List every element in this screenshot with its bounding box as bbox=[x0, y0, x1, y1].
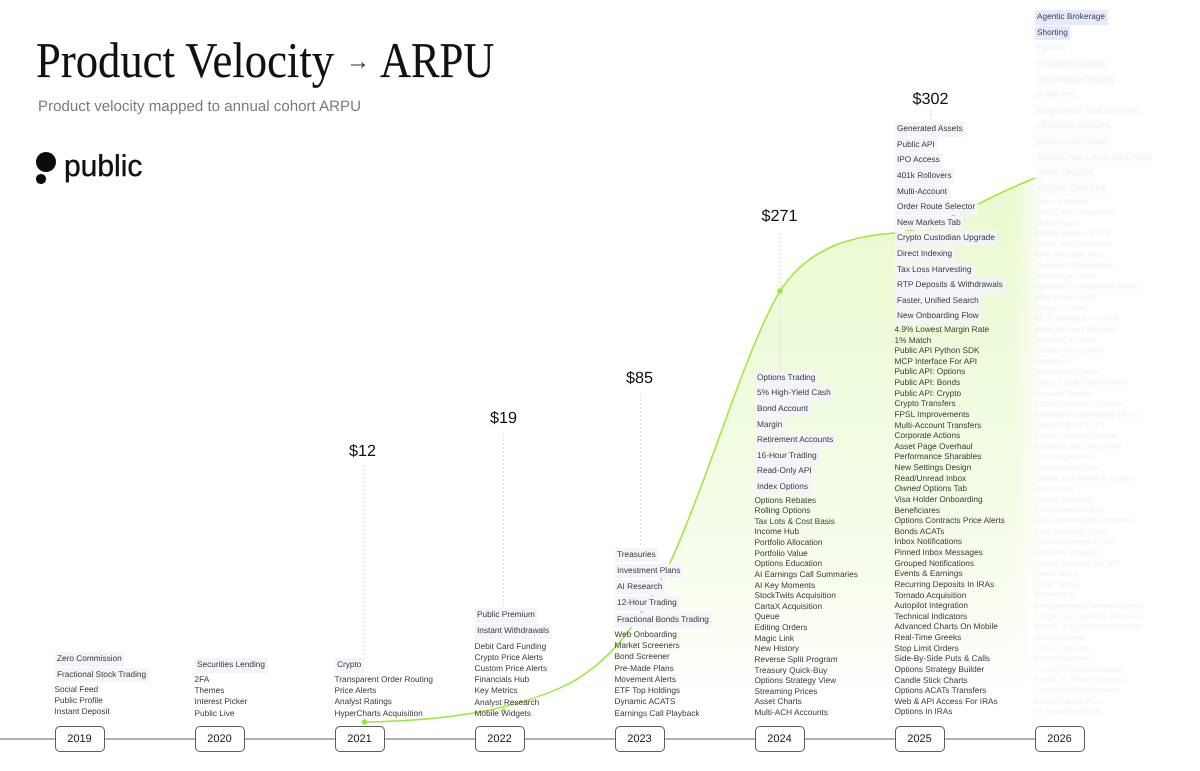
column: 2025 features: Recurring Deposits In IRAs bbox=[894, 580, 994, 589]
column: 2025 features: Options Strategy Builder bbox=[894, 665, 984, 674]
column: 2026 faded roadmap features: Shipping in Vista bbox=[1034, 335, 1096, 344]
column: 2020 features: Themes bbox=[194, 686, 224, 695]
column: 2025 features: Inbox Notifications bbox=[894, 537, 962, 546]
column: 2026 faded roadmap features: SPDR New Accounts bbox=[1034, 240, 1112, 249]
year marker: 2023 bbox=[614, 726, 664, 752]
column: 2023 features: Movement Alerts bbox=[614, 675, 676, 684]
column: 2026 highlighted features: Shorting bbox=[1037, 28, 1068, 37]
column: 2024 features: AI Earnings Call Summaries bbox=[754, 570, 858, 579]
column: 2024 features: 16-Hour Trading bbox=[757, 451, 817, 460]
column: 2024 features: Retirement Accounts bbox=[757, 435, 833, 444]
column: 2024 features: Options Strategy View bbox=[754, 676, 836, 685]
area under ARPU curve bbox=[618, 177, 1038, 648]
column: 2024 features: Portfolio Value bbox=[754, 549, 808, 558]
column: 2025 features: FPSL Improvements bbox=[894, 410, 970, 419]
column: 2025 features: Public API: Options bbox=[894, 367, 965, 376]
year marker: 2022 bbox=[474, 726, 524, 752]
column: 2022 features: Mobile Widgets bbox=[474, 709, 531, 718]
column: 2024 features: 5% High-Yield Cash bbox=[757, 388, 831, 397]
column: 2020 features: Interest Picker bbox=[194, 697, 247, 706]
column: 2024 features: Rolling Options bbox=[754, 506, 811, 515]
column: 2025 features: Read/Unread Inbox bbox=[894, 474, 966, 483]
column: 2025 features: Faster, Unified Search bbox=[897, 296, 979, 305]
column: 2026 faded roadmap features: Income Cash Year Start bbox=[1034, 442, 1122, 451]
column: 2026 faded roadmap features: New Rewards Hub bbox=[1034, 250, 1103, 259]
column: 2025 features: Options In IRAs bbox=[894, 707, 952, 716]
column: 2026 faded roadmap features: Reallocation Hub bbox=[1034, 463, 1097, 472]
column: 2026 faded roadmap features: Free Earnings Calls bbox=[1034, 527, 1107, 536]
column: 2024 features: Read-Only API bbox=[757, 466, 812, 475]
year marker: 2025: 2025 bbox=[907, 733, 932, 745]
column: 2023 features: Treasuries bbox=[617, 550, 656, 558]
column: 2024 features: Streaming Prices bbox=[754, 687, 817, 696]
column: 2023 features bbox=[614, 548, 711, 718]
year marker: 2021: 2021 bbox=[347, 733, 372, 745]
year marker: 2019: 2019 bbox=[67, 733, 92, 745]
subtitle: Product velocity mapped to annual cohort ARPU bbox=[38, 98, 361, 115]
column: 2025 features: 1% Match bbox=[894, 336, 931, 345]
column: 2019 features: Fractional Stock Trading bbox=[57, 670, 146, 679]
column: 2023 features: Pre-Made Plans bbox=[614, 664, 674, 672]
column: 2025 features: Visa Holder Onboarding bbox=[894, 495, 983, 504]
column: 2021 features: Transparent Order Routing bbox=[334, 675, 433, 684]
column: 2026 faded roadmap features: Prediction Markets bbox=[1037, 59, 1105, 68]
column: 2024 features: Options Trading bbox=[757, 373, 815, 382]
column: 2026 faded roadmap features: Direct Indexing in IRA bbox=[1034, 537, 1114, 546]
column: 2025 features: Stop Limit Orders bbox=[894, 644, 959, 653]
column: 2026 faded roadmap features: Charitable Accounts bbox=[1037, 121, 1111, 130]
column: 2019 features: Instant Deposit bbox=[54, 707, 110, 716]
column: 2026 highlighted features: Agentic Brokerage bbox=[1037, 12, 1105, 21]
column: 2022 features: Custom Price Alerts bbox=[474, 664, 547, 673]
column: 2024 features: Queue bbox=[754, 612, 779, 621]
column: 2025 features: Order Route Selector bbox=[897, 202, 975, 211]
column: 2024 features: Margin bbox=[757, 420, 782, 429]
column: 2021 features: HyperCharts Acquisition bbox=[334, 709, 423, 718]
curve data points bbox=[362, 288, 783, 725]
column: 2026 faded roadmap features: Crypto In Corporate Accounts bbox=[1034, 612, 1143, 621]
column: 2026 faded roadmap features: IRA Tailored Index Options bbox=[1034, 516, 1132, 525]
column: 2026 faded roadmap features: Resources bbox=[1034, 484, 1074, 493]
column: 2022 features: Crypto Price Alerts bbox=[474, 653, 543, 662]
column: 2019 features: Public Profile bbox=[54, 696, 103, 705]
column: 2026 faded roadmap features: Pocket Identity Vehicle bbox=[1034, 431, 1118, 440]
column: 2026 faded roadmap features: Trade Menu bbox=[1034, 569, 1079, 578]
column: 2023 features: Web Onboarding bbox=[614, 630, 677, 639]
column: 2024 features: Magic Link bbox=[754, 634, 794, 643]
column: 2026 faded roadmap features: Tax-Lot Selling bbox=[1034, 197, 1089, 206]
column: 2026 faded roadmap features: Brokerage Offers bbox=[1034, 272, 1097, 281]
column: 2026 faded roadmap features: UHNI Asset Default bbox=[1037, 137, 1108, 146]
column: 2024 features: Options Rebates bbox=[754, 496, 816, 504]
column: 2026 faded roadmap features: Earn Assets in App bbox=[1034, 505, 1104, 514]
column: 2026 faded roadmap features: Public Family Plan bbox=[1034, 697, 1102, 706]
column: 2025 features: Crypto Custodian Upgrade bbox=[897, 233, 995, 242]
column: 2019 features: Social Feed bbox=[54, 685, 98, 694]
column: 2025 features: Crypto Transfers bbox=[894, 399, 956, 408]
year marker: 2020 bbox=[194, 726, 244, 752]
column: 2026 faded roadmap features: Attributed Onboarding Notes bbox=[1034, 282, 1139, 291]
column: 2025 features: Public API bbox=[897, 140, 935, 149]
column: 2025 features: MCP Interface For API bbox=[894, 357, 977, 366]
column: 2025 features: 401k Rollovers bbox=[897, 171, 952, 180]
column: 2026 faded roadmap features bbox=[1034, 43, 1150, 716]
column: 2021 features: Crypto bbox=[337, 660, 361, 669]
column: 2020 features: 2FA bbox=[194, 675, 209, 684]
ARPU value: 2025: $302 bbox=[912, 90, 948, 108]
column: 2024 features: Reverse Split Program bbox=[754, 655, 838, 664]
column: 2024 features: Treasury Quick-Buy bbox=[754, 666, 827, 674]
column: 2025 features: Bonds ACATs bbox=[894, 527, 944, 536]
column: 2025 features: 4.9% Lowest Margin Rate bbox=[894, 325, 989, 334]
year marker: 2026: 2026 bbox=[1047, 733, 1072, 745]
column: 2023 features: Fractional Bonds Trading bbox=[617, 614, 709, 624]
title: → bbox=[346, 49, 370, 75]
column: 2025 features: Options ACATs Transfers bbox=[894, 686, 986, 695]
year marker: 2024: 2024 bbox=[767, 733, 792, 745]
column: 2025 features: Multi-Account Transfers bbox=[894, 421, 981, 430]
column: 2026 faded roadmap features: Asset Notes bbox=[1034, 580, 1079, 589]
column: 2024 features: AI Key Moments bbox=[754, 580, 815, 590]
column: 2025 features: Public API Python SDK bbox=[894, 346, 980, 355]
column: 2026 faded roadmap features: Futures bbox=[1037, 43, 1065, 52]
column: 2024 features: Bond Account bbox=[757, 404, 808, 413]
column: 2024 features bbox=[754, 371, 858, 717]
column: 2026 faded roadmap features: Rewards Program bbox=[1034, 548, 1101, 557]
column: 2026 faded roadmap features: Advanced Charts bbox=[1034, 367, 1098, 376]
column: 2024 features: Income Hub bbox=[754, 527, 799, 536]
column: 2025 features: Options Contracts Price Alerts bbox=[894, 516, 1005, 525]
column: 2026 faded roadmap features: Dividends Messaging bbox=[1034, 261, 1113, 270]
column: 2025 features: Real-Time Greeks bbox=[894, 633, 961, 642]
ARPU value: 2024: $271 bbox=[761, 207, 798, 225]
column: 2023 features: Investment Plans bbox=[617, 566, 680, 575]
column: 2024 features: New History bbox=[754, 644, 799, 653]
column: 2020 features: Public Live bbox=[194, 709, 234, 718]
column: 2026 faded roadmap features: Equity Factor ETFs bbox=[1034, 420, 1105, 429]
column: 2026 faded roadmap features: Programming Concept (Web) bbox=[1034, 601, 1142, 610]
column: 2025 features: Web & API Access For IRAs bbox=[894, 697, 998, 706]
column: 2025 features: Tax Loss Harvesting bbox=[897, 265, 971, 274]
column: 2026 faded roadmap features: Tax Integrations bbox=[1034, 452, 1093, 461]
year marker: 2024 bbox=[754, 726, 804, 752]
column: 2026 faded roadmap features: Level 2 Quotes bbox=[1034, 644, 1090, 653]
column: 2026 faded roadmap features: Account Cash Line bbox=[1037, 184, 1106, 193]
year marker: 2022: 2022 bbox=[487, 733, 512, 745]
column: 2026 faded roadmap features: Custodial/IRA Accounts bbox=[1034, 686, 1120, 695]
column: 2024 features: Multi-ACH Accounts bbox=[754, 708, 828, 717]
year marker: 2026 bbox=[1034, 726, 1084, 752]
column: 2020 features: Securities Lending bbox=[197, 660, 265, 669]
column: 2020 features bbox=[194, 658, 268, 718]
column: 2024 features: Tax Lots & Cost Basis bbox=[754, 517, 835, 526]
column: 2025 features: Corporate Actions bbox=[894, 431, 960, 440]
column: 2025 features: Public API: Crypto bbox=[894, 389, 961, 398]
column: 2024 features: Asset Charts bbox=[754, 697, 802, 706]
column: 2026 faded roadmap features: Macro Events bbox=[1034, 633, 1085, 642]
column: 2025 features: IPO Access bbox=[897, 155, 940, 164]
column: 2019 features: Zero Commission bbox=[57, 654, 122, 663]
ARPU value: 2023: $85 bbox=[626, 369, 653, 387]
column: 2025 features: Generated Assets bbox=[897, 124, 963, 133]
column: 2026 faded roadmap features: Alto Acquisition bbox=[1034, 654, 1091, 663]
column: 2024 features: Index Options bbox=[757, 482, 808, 491]
column: 2021 features: Analyst Ratings bbox=[334, 697, 392, 706]
title: ARPU bbox=[380, 32, 494, 88]
column: 2026 faded roadmap features: Crypto Support For API bbox=[1034, 559, 1120, 568]
column: 2026 faded roadmap features: Public Pro bbox=[1037, 90, 1075, 99]
column: 2025 features: Asset Page Overhaul bbox=[894, 442, 973, 451]
column: 2026 faded roadmap features: Public Premium Royalty bbox=[1034, 399, 1122, 408]
column: 2025 features: Public API: Bonds bbox=[894, 378, 960, 387]
column: 2025 features: Autopilot Integration bbox=[894, 601, 968, 610]
column: 2026 faded roadmap features: MCP Interface For IRA bbox=[1034, 314, 1118, 323]
column: 2025 features: New Settings Design bbox=[894, 463, 971, 472]
year marker: 2019 bbox=[54, 726, 104, 752]
ARPU curve line bbox=[364, 178, 1035, 722]
column: 2025 features: Events & Earnings bbox=[894, 569, 962, 578]
year marker: 2025 bbox=[894, 726, 944, 752]
column: 2025 features: Pinned Inbox Messages bbox=[894, 548, 983, 557]
column: 2023 features: Dynamic ACATS bbox=[614, 697, 675, 706]
column: 2025 features: Technical Indicators bbox=[894, 612, 967, 621]
column: 2025 features: Multi-Account bbox=[897, 187, 947, 196]
column: 2026 faded roadmap features: Corporate & Trust Accounts bbox=[1037, 106, 1138, 115]
logo: public: public bbox=[64, 150, 142, 183]
column: 2025 features: Tornado Acquisition bbox=[894, 591, 966, 600]
column: 2025 features: Direct Indexing bbox=[897, 249, 952, 258]
column: 2025 features: Performance Sharables bbox=[894, 452, 981, 461]
column: 2025 features: Owned Options Tab bbox=[894, 484, 967, 493]
column: 2026 faded roadmap features: Order Types bbox=[1034, 219, 1080, 228]
column: 2023 features: Market Screeners bbox=[614, 641, 680, 650]
column: 2026 faded roadmap features: 24/5 Equities Trading bbox=[1037, 75, 1115, 84]
column: 2023 features: 12-Hour Trading bbox=[617, 598, 677, 607]
column: 2022 features bbox=[474, 608, 552, 718]
column: 2021 features bbox=[334, 658, 433, 718]
ARPU value: 2022: $19 bbox=[490, 409, 517, 427]
column: 2024 features: CartaX Acquisition bbox=[754, 602, 822, 611]
column: 2023 features: ETF Top Holdings bbox=[614, 686, 680, 695]
column: 2026 faded roadmap features: Analytics+ bbox=[1034, 357, 1072, 366]
column: 2026 faded roadmap features: Plaid Loan Integration bbox=[1034, 208, 1115, 217]
column: 2023 features: AI Research bbox=[617, 582, 662, 591]
column: 2026 faded roadmap features: AI-Assist Accounts bbox=[1034, 707, 1103, 716]
chart: timeline, ARPU curve and area bbox=[0, 110, 1038, 740]
column: 2025 features: Side-By-Side Puts & Calls bbox=[894, 654, 990, 663]
column: 2024 features: Portfolio Allocation bbox=[754, 538, 823, 547]
column: 2026 highlighted features bbox=[1035, 10, 1108, 40]
column: 2026 faded roadmap features: Crypto Stocking bbox=[1034, 495, 1093, 504]
title bbox=[36, 32, 494, 88]
year marker: 2021 bbox=[334, 726, 384, 752]
column: 2022 features: Financials Hub bbox=[474, 675, 529, 684]
column: 2025 features: Grouped Notifications bbox=[894, 559, 974, 568]
column: 2023 features: Bond Screener bbox=[614, 652, 670, 661]
column: 2024 features: Editing Orders bbox=[754, 623, 807, 632]
column: 2026 faded roadmap features: Crypto in IRAs bbox=[1034, 304, 1088, 313]
year marker: 2020: 2020 bbox=[207, 733, 232, 745]
column: 2025 features: RTP Deposits & Withdrawals bbox=[897, 280, 1003, 289]
column: 2026 faded roadmap features: Bonds Screen in IRA bbox=[1034, 229, 1111, 238]
column: 2024 features: Options Education bbox=[754, 559, 822, 568]
column: 2023 features: Earnings Call Playback bbox=[614, 708, 700, 718]
dotted value leaders bbox=[364, 110, 930, 658]
column: 2026 faded roadmap features: Crypto In Trust Accounts bbox=[1034, 665, 1125, 674]
column: 2024 features: StockTwits Acquisition bbox=[754, 591, 836, 600]
column: 2026 faded roadmap features: Trading Year Lost & Take Profit bbox=[1037, 153, 1150, 162]
column: 2025 features: New Onboarding Flow bbox=[897, 311, 979, 320]
year marker: 2023: 2023 bbox=[627, 733, 652, 745]
column: 2021 features: Price Alerts bbox=[334, 686, 376, 695]
title: Product Velocity bbox=[36, 32, 334, 88]
column: 2022 features: Public Premium bbox=[477, 610, 535, 619]
column: 2025 features: Beneficiares bbox=[894, 506, 940, 515]
column: 2026 faded roadmap features: Closed-End Funds bbox=[1034, 346, 1103, 355]
column: 2019 features bbox=[54, 652, 149, 716]
column: 2026 faded roadmap features: Attributed Onboarding Flows bbox=[1034, 410, 1139, 419]
column: 2025 features: New Markets Tab bbox=[897, 218, 961, 227]
ARPU value: 2021: $12 bbox=[349, 442, 376, 460]
column: 2022 features: Debit Card Funding bbox=[474, 642, 546, 651]
column: 2022 features: Analyst Research bbox=[474, 698, 539, 707]
column: 2026 faded roadmap features: Smart Deposits bbox=[1037, 168, 1094, 177]
column: 2025 features bbox=[894, 122, 1005, 716]
column: 2026 faded roadmap features: After-Hours Hub bbox=[1034, 293, 1094, 302]
column: 2026 faded roadmap features: Bonds In Corporate Accounts bbox=[1034, 622, 1142, 631]
column: 2025 features: Advanced Charts On Mobile bbox=[894, 622, 998, 631]
column: 2026 faded roadmap features: Account Sweep bbox=[1034, 389, 1092, 398]
column: 2026 faded roadmap features: Bonds In Trust Accounts bbox=[1034, 675, 1124, 684]
column: 2026 faded roadmap features: Meme Hub bbox=[1034, 590, 1075, 599]
column: 2025 features: Candle Stick Charts bbox=[894, 676, 968, 685]
column: 2022 features: Instant Withdrawals bbox=[477, 626, 549, 635]
column: 2026 faded roadmap features: Quick Trade Ticket Sheet bbox=[1034, 378, 1127, 387]
column: 2026 faded roadmap features: Multi-Account Widgets bbox=[1034, 325, 1117, 334]
timeline axis bbox=[0, 738, 1035, 740]
column: 2022 features: Key Metrics bbox=[474, 686, 518, 695]
column: 2026 faded roadmap features: Queue For Bonds & Crypto bbox=[1034, 474, 1134, 483]
